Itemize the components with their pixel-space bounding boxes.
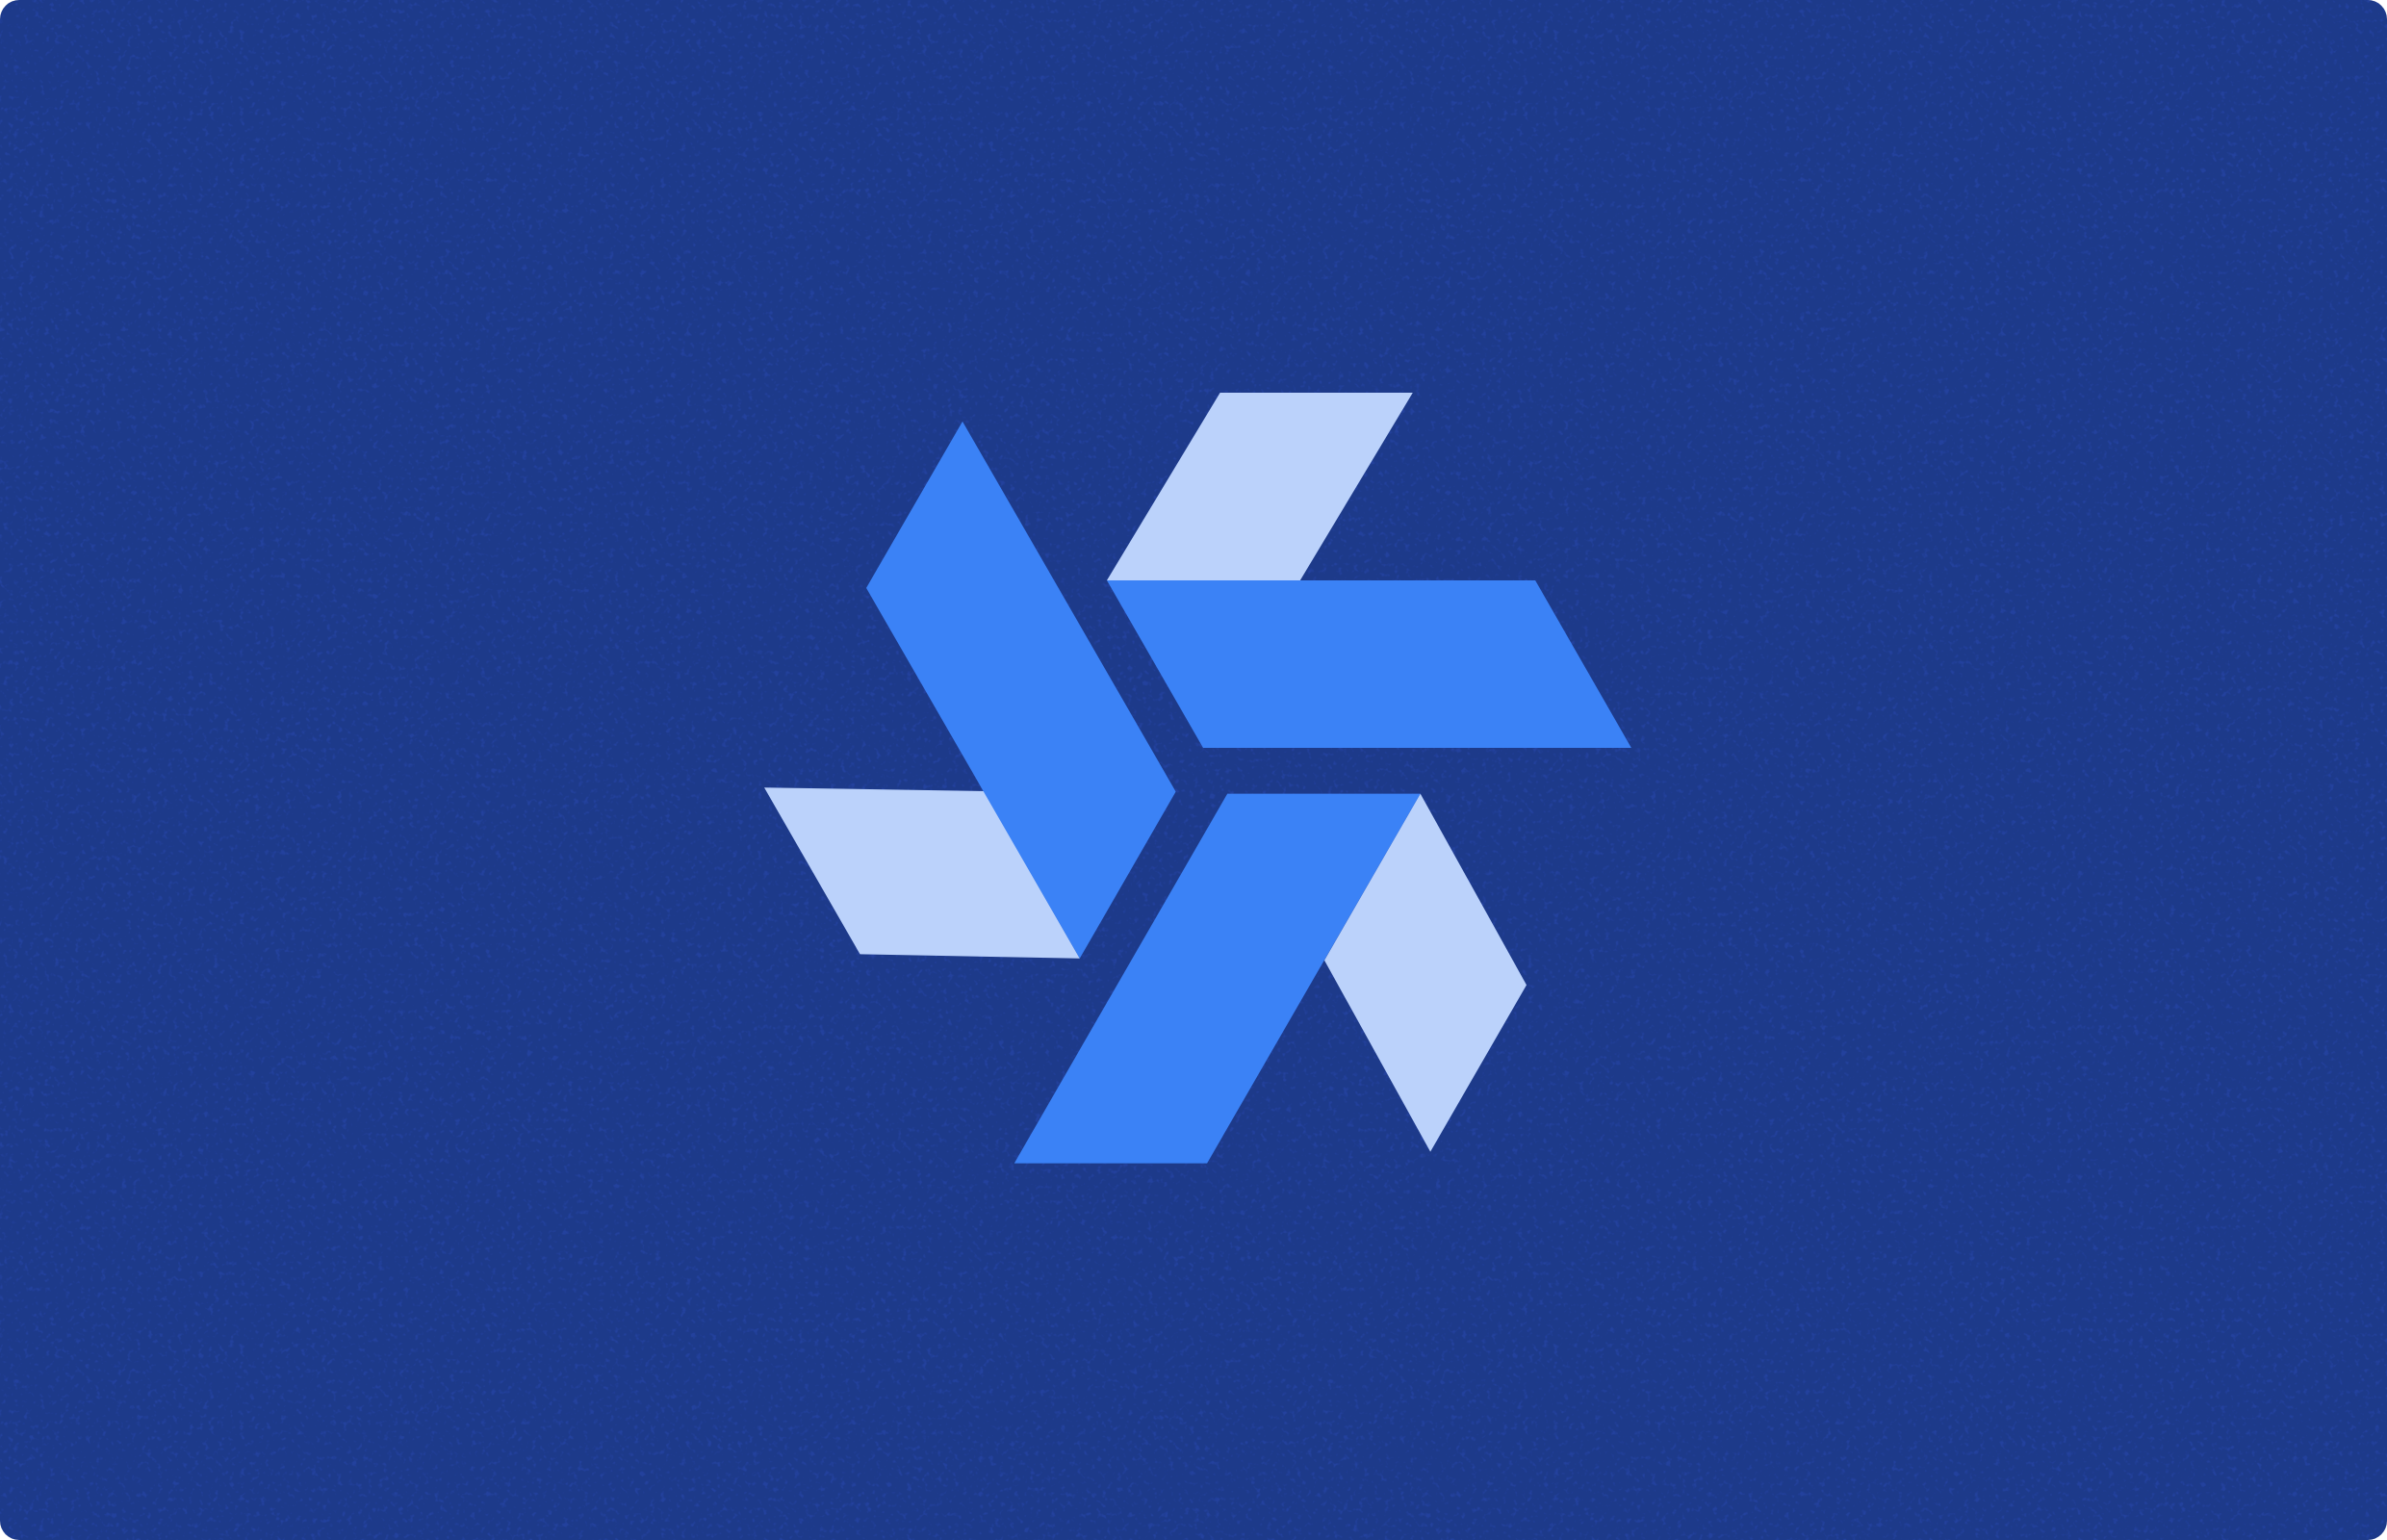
icon: pinwheel logo [764, 393, 1631, 1164]
light blade: right [1324, 794, 1527, 1152]
light blade: top [1107, 393, 1413, 580]
blue blade: top right [1107, 580, 1631, 748]
blue blade: bottom [1014, 794, 1421, 1164]
light blade: left [764, 787, 1080, 959]
blue blade: left [866, 422, 1176, 959]
